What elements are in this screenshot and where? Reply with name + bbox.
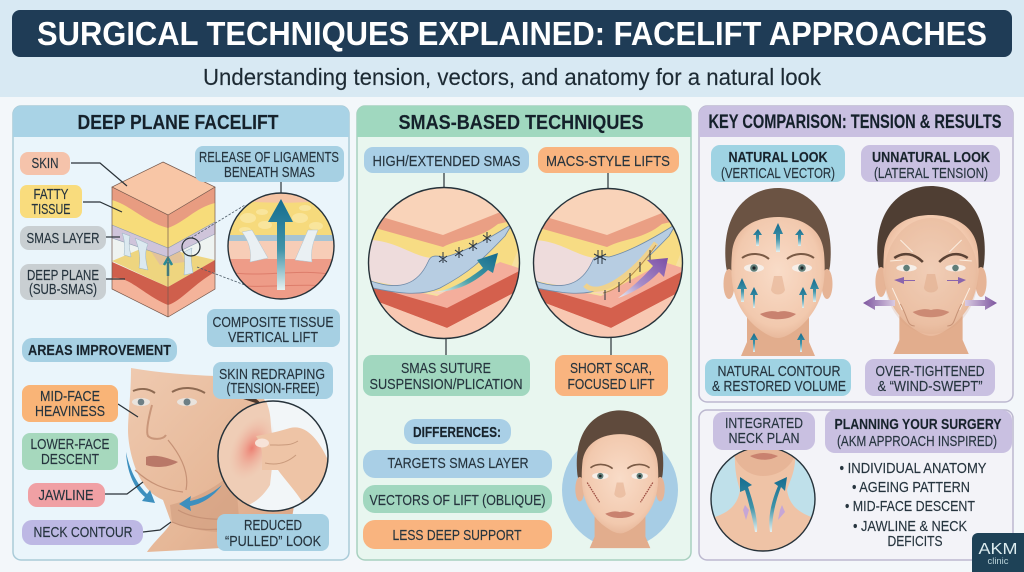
- diagram: ligament release magnified: [228, 193, 334, 299]
- illustration: integrated neck circle: [706, 447, 820, 551]
- arrows: descent and tension arrows: [126, 452, 222, 511]
- callout: release of ligaments: BENEATH SMAS: [224, 165, 315, 181]
- callout: composite tissue vertical lift: [207, 309, 340, 347]
- pill: vectors of lift: [363, 485, 552, 513]
- subheading: areas improvement: [22, 338, 177, 362]
- pill: natural look: (VERTICAL VECTOR): [721, 166, 835, 182]
- title bar: [12, 10, 1012, 57]
- list: planning factors: • AGEING PATTERN: [852, 480, 970, 496]
- list: planning factors: [840, 461, 987, 550]
- pill: macs-style lifts: MACS-STYLE LIFTS: [546, 154, 670, 170]
- arrows: lateral tension vectors: [863, 277, 997, 310]
- pill: targets smas layer: TARGETS SMAS LAYER: [388, 456, 528, 472]
- panel: planning your surgery: [699, 410, 1013, 560]
- label: smas layer: [20, 226, 120, 250]
- label: deep plane: DEEP PLANE: [27, 268, 99, 284]
- illustration: face with smas incision lines: [562, 410, 678, 548]
- pill: natural contour: [705, 359, 851, 396]
- pill: smas suture suspension: SUSPENSION/PLICATION: [370, 377, 522, 393]
- pill: high/extended smas: [364, 147, 529, 173]
- callout: release of ligaments: RELEASE OF LIGAMENTS: [199, 150, 339, 166]
- heading: planning your surgery: [825, 410, 1012, 453]
- label: skin: SKIN: [32, 156, 58, 172]
- logo: akm clinic: AKM: [978, 541, 1018, 558]
- pill: natural look: [711, 145, 845, 182]
- pill: natural look: NATURAL LOOK: [728, 150, 828, 166]
- pill: over-tightened: OVER-TIGHTENED: [876, 364, 984, 380]
- connector lines: [444, 173, 611, 355]
- logo: akm clinic: [972, 533, 1024, 572]
- label: skin: [20, 152, 127, 186]
- pill: over-tightened: [865, 359, 995, 396]
- pill: short scar focused lift: SHORT SCAR,: [570, 361, 652, 377]
- label: neck contour: NECK CONTOUR: [34, 525, 132, 541]
- pill: less deep support: [363, 520, 552, 549]
- callout: composite tissue vertical lift: COMPOSITE TISSUE: [212, 315, 334, 331]
- list: planning factors: DEFICITS: [888, 534, 942, 550]
- label: jawline: [28, 482, 143, 507]
- pill: smas suture suspension: [363, 355, 530, 396]
- list: planning factors: • JAWLINE & NECK: [853, 519, 967, 535]
- pill: integrated neck plan: NECK PLAN: [728, 431, 800, 447]
- label: neck contour: [22, 520, 171, 545]
- illustration: unnatural face with lateral tension: [863, 186, 997, 354]
- pill: short scar focused lift: FOCUSED LIFT: [568, 377, 655, 393]
- heading: smas-based techniques: SMAS-BASED TECHNIQUES: [398, 112, 644, 134]
- label: jawline: JAWLINE: [38, 488, 94, 504]
- diagram: high smas flap and suture: [368, 186, 520, 340]
- label: lower-face descent: [22, 433, 118, 470]
- photo: aged face in three-quarter view: [128, 368, 300, 552]
- label: fatty tissue: TISSUE: [32, 202, 71, 218]
- panel: key comparison: [699, 106, 1013, 402]
- label: lower-face descent: LOWER-FACE: [30, 437, 110, 453]
- pill: over-tightened: & “WIND-SWEPT”: [878, 379, 983, 395]
- label: fatty tissue: FATTY: [34, 187, 69, 203]
- subtitle: Understanding tension, vectors, and anatomy for a natural look: [203, 64, 821, 90]
- subheading: areas improvement: AREAS IMPROVEMENT: [28, 343, 171, 359]
- pill: smas suture suspension: SMAS SUTURE: [401, 361, 491, 377]
- pill: natural contour: NATURAL CONTOUR: [718, 364, 840, 380]
- label: mid-face heaviness: HEAVINESS: [35, 404, 105, 420]
- callout: reduced pulled look: “PULLED” LOOK: [225, 534, 321, 550]
- pill: macs-style lifts: [538, 147, 679, 173]
- pill: integrated neck plan: [713, 412, 815, 450]
- pill: integrated neck plan: INTEGRATED: [725, 416, 803, 432]
- arrows: vertical lift vectors: [737, 223, 819, 352]
- callout: composite tissue vertical lift: VERTICAL LIFT: [228, 330, 318, 346]
- callout: skin redraping: [213, 362, 333, 399]
- label: deep plane: (SUB-SMAS): [29, 282, 97, 298]
- panel: deep plane facelift: [13, 106, 349, 560]
- pill: high/extended smas: HIGH/EXTENDED SMAS: [372, 154, 520, 170]
- pill: unnatural look: (LATERAL TENSION): [874, 166, 988, 182]
- title: SURGICAL TECHNIQUES EXPLAINED: FACELIFT APPROACHES: [37, 15, 987, 52]
- label: mid-face heaviness: [22, 385, 138, 422]
- heading: deep plane facelift: DEEP PLANE FACELIFT: [78, 112, 278, 134]
- pill: vectors of lift: VECTORS OF LIFT (OBLIQUE): [370, 493, 546, 509]
- callout: reduced pulled look: [217, 514, 329, 551]
- subheading: differences: DIFFERENCES:: [413, 425, 501, 441]
- list: planning factors: • INDIVIDUAL ANATOMY: [840, 461, 987, 477]
- pill: natural contour: & RESTORED VOLUME: [712, 379, 846, 395]
- illustration: natural face with vertical vectors: [724, 188, 832, 356]
- label: fatty tissue: [20, 185, 122, 218]
- list: planning factors: • MID-FACE DESCENT: [845, 499, 975, 515]
- pill: short scar focused lift: [555, 355, 668, 396]
- callout: skin redraping: (TENSION-FREE): [226, 381, 320, 397]
- callout: reduced pulled look: REDUCED: [244, 518, 302, 534]
- label: mid-face heaviness: MID-FACE: [40, 389, 100, 405]
- logo: akm clinic: clinic: [988, 556, 1009, 566]
- pill: less deep support: LESS DEEP SUPPORT: [392, 528, 522, 544]
- header band: [0, 0, 1024, 97]
- label: lower-face descent: DESCENT: [41, 452, 99, 468]
- diagram: tissue layer cube: [112, 162, 245, 317]
- pill: unnatural look: UNNATURAL LOOK: [872, 150, 990, 166]
- label: deep plane: [20, 264, 125, 300]
- pill: targets smas layer: [363, 450, 552, 478]
- panel: smas-based techniques: [357, 106, 694, 560]
- diagram: macs-style purse-string lift: [532, 188, 684, 338]
- callout: release of ligaments: [195, 146, 344, 193]
- label: smas layer: SMAS LAYER: [26, 231, 100, 247]
- subheading: differences: [404, 419, 511, 444]
- inset: skin redraping with hand: [218, 401, 328, 511]
- callout: skin redraping: SKIN REDRAPING: [219, 367, 325, 383]
- pill: unnatural look: [861, 145, 1000, 182]
